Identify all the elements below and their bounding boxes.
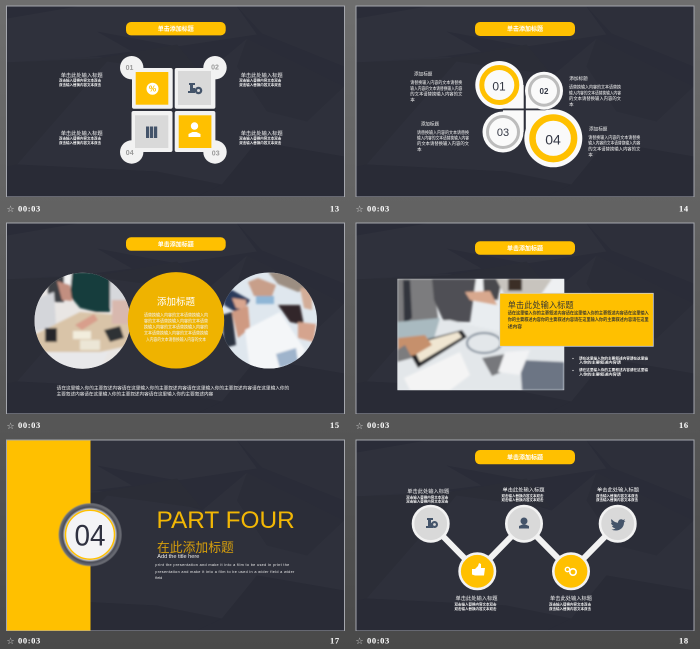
text block 02: 本 [569, 101, 574, 108]
badge number 03: 03 [212, 151, 220, 158]
badge circle 02 [203, 56, 227, 79]
bullet list: 请在这里输入你的主要叙述内容请在这里输 [579, 367, 648, 372]
text block 02: 添加标题 [569, 75, 588, 82]
label 5: 双击输入替换内容文本双击 [596, 497, 638, 502]
footer 18: 18 [679, 636, 689, 646]
circle 03 [482, 110, 524, 152]
label 3: 双击输入替换内容文本双击 [502, 493, 544, 498]
label top right: 双击输入替换内容文本双击 [239, 82, 282, 87]
circle 01: 01 [492, 80, 506, 94]
title pill: 单击添加标题 [507, 244, 543, 252]
yellow circle with text: 入内容的文本请替换输入内容的文本 [146, 336, 206, 343]
footer 18: 00:03 [367, 636, 390, 646]
label 1: 双击输入替换内容文本双击 [406, 498, 449, 504]
label 5: 双击输入替换内容文本双击 [596, 493, 638, 498]
yellow text box: 单击此处输入标题 [508, 300, 574, 310]
badge number 01: 01 [126, 65, 133, 72]
tile: columns [132, 111, 172, 152]
text block 04: 添加标题 [589, 126, 608, 133]
panel: slide 16 [356, 223, 694, 414]
tile: percent: % [149, 84, 156, 94]
subheading: 在此添加标题 [157, 540, 234, 555]
badge number 04: 04 [126, 150, 134, 157]
label 2: 双击输入替换内容文本双击 [454, 606, 497, 611]
label 1: 双击输入替换内容文本双击 [406, 494, 449, 500]
footer 13: 00:03 [18, 204, 41, 214]
footer 16 [356, 420, 689, 432]
footer 16: 16 [679, 420, 689, 430]
text block 01: 请替换输入内容的文本请替换 [410, 79, 463, 86]
circle 01 [475, 61, 524, 109]
footer 15: ☆ [6, 422, 15, 432]
zigzag connector [431, 524, 618, 571]
tile: money [175, 68, 215, 109]
bottom text block: 主要叙述内容请在这里输入你的主要叙述内容请在这里输入你的主要叙述内容 [57, 390, 214, 397]
footer 18 [356, 636, 689, 647]
label top left: 双击输入替换内容文本双击 [59, 82, 101, 87]
label bottom left: 单击此处输入标题 [61, 129, 103, 137]
label bottom right: 双击输入替换内容文本双击 [239, 136, 282, 140]
yellow circle with text: 换输入内容的文本请替换输入内容的 [144, 324, 208, 330]
footer 14: 14 [679, 204, 689, 214]
description text [155, 563, 295, 580]
number badge 04 [58, 503, 122, 567]
yellow text box: 述内容 [508, 323, 522, 330]
text block 03: 输入内容的文本请替换输入内容 [417, 134, 469, 142]
tile: percent [132, 68, 173, 109]
text block 04: 的文本请替换输入内容的文 [588, 145, 641, 152]
yellow text box [500, 293, 653, 346]
text block 01: 本 [410, 96, 415, 104]
label top right: 双击输入替换内容文本双击 [239, 78, 282, 82]
yellow text box: 请在这里输入你的主要叙述内容请在这里输入你的主要叙述内容请在这里输入 [508, 310, 649, 317]
yellow circle with text: 容的文本请替换输入内容的文本请替 [144, 318, 208, 324]
footer 13: ☆ [6, 205, 15, 215]
label 5 [596, 485, 640, 502]
text block 01 [410, 70, 463, 104]
text block 04: 输入内容的文本请替换输入内容 [588, 140, 641, 147]
footer 16: 00:03 [367, 420, 390, 430]
badge circle 01 [120, 56, 143, 79]
bullet list: 入你的主要叙述内容请 [579, 371, 621, 376]
footer 14 [356, 204, 689, 215]
footer 17 [6, 636, 340, 647]
label bottom left: 双击输入替换内容文本双击 [59, 136, 101, 140]
tile: person [175, 111, 215, 152]
footer 15: 15 [330, 420, 340, 430]
bottom text block [57, 384, 290, 397]
title pill [475, 22, 575, 36]
badge circle 04 [120, 140, 143, 164]
photo: business meeting [397, 279, 565, 390]
title pill: 单击添加标题 [507, 25, 543, 33]
description text: field [155, 576, 162, 580]
label 3: 双击输入替换内容文本双击 [502, 497, 544, 502]
bottom text block: 请在这里输入你的主要叙述内容请在这里输入你的主要叙述内容请在这里输入你的主要叙述内容请在这里输入你的 [57, 384, 290, 392]
yellow side band [7, 440, 90, 630]
footer 13: 13 [330, 204, 340, 214]
label bottom left [59, 129, 103, 145]
circle 03: 03 [497, 127, 509, 139]
text block 03 [417, 120, 469, 153]
description text: print the presentation and make it into a film to be used in print the [155, 563, 289, 567]
text block 02: 请替换输入内容的文本请替换 [569, 84, 621, 91]
panel: slide 18 [356, 440, 694, 630]
label 2: 单击此处输入标题 [456, 594, 498, 602]
label bottom right [239, 129, 283, 145]
title pill: 单击添加标题 [507, 453, 543, 461]
text block 01: 输入内容的文本请替换输入内容 [410, 85, 463, 92]
footer 18: ☆ [356, 637, 364, 647]
footer 14: ☆ [356, 205, 364, 215]
title pill: 单击添加标题 [158, 25, 194, 33]
yellow text box: 你的主要叙述内容你的主要叙述内容请在这里输入你的主要叙述内容请在这里 [508, 316, 649, 323]
yellow circle with text: 请替换输入内容的文本请替换输入内 [144, 312, 208, 318]
label 1 [406, 487, 450, 504]
badge circle 03 [203, 140, 227, 164]
panel: slide 17 [6, 440, 344, 630]
heading: part four: PART FOUR [156, 507, 295, 534]
text block 03: 请替换输入内容的文本请替换 [417, 129, 469, 136]
title pill [126, 237, 226, 251]
panel: slide 13 [6, 6, 344, 196]
text block 03: 添加标题 [421, 120, 439, 127]
panel: slide 14 [356, 6, 694, 196]
label 4: 双击输入替换内容文本双击 [549, 606, 591, 611]
label 5: 单击此处输入标题 [597, 485, 640, 493]
text block 03: 的文本请替换输入内容的文 [417, 140, 469, 147]
footer 17: ☆ [6, 637, 15, 647]
description text: presentation and make it into a film to be used in a wider field a wider [155, 570, 295, 574]
footer 15 [6, 420, 340, 432]
circle 04 [524, 109, 582, 167]
node 4: link icon [553, 554, 589, 589]
title pill [126, 22, 226, 35]
node 5: twitter icon [600, 506, 635, 541]
label 3: 单击此处输入标题 [502, 485, 545, 493]
label 4: 单击此处输入标题 [550, 594, 593, 602]
number badge 04: 04 [74, 520, 106, 553]
circle 02 [525, 72, 563, 110]
label 1: 单击此处输入标题 [407, 487, 450, 495]
label 2: 双击输入替换内容文本双击 [454, 602, 497, 606]
circle 04: 04 [545, 132, 561, 148]
badge number 02: 02 [211, 64, 219, 72]
label 3 [502, 485, 545, 502]
panel: slide 15 [6, 223, 344, 414]
label 4: 双击输入替换内容文本双击 [549, 602, 591, 606]
title pill [475, 241, 575, 255]
label bottom right: 单击此处输入标题 [241, 129, 283, 137]
bullet list [572, 356, 648, 376]
text block 02: 的文本请替换输入内容的文 [569, 95, 621, 102]
text block 04 [588, 126, 641, 158]
label top left: 双击输入替换内容文本双击 [59, 78, 101, 82]
node 1: money icon [413, 506, 448, 541]
footer 16: ☆ [356, 422, 364, 432]
footer 15: 00:03 [18, 420, 41, 430]
footer 14: 00:03 [367, 204, 390, 214]
title pill: 单击添加标题 [158, 240, 194, 248]
label 4 [549, 594, 593, 611]
text block 01: 添加标题 [414, 70, 433, 78]
text block 04: 本 [588, 151, 593, 158]
footer 13 [6, 204, 340, 215]
node 2: thumb icon [460, 554, 495, 589]
footer 17: 00:03 [18, 636, 41, 646]
english subtitle: Add the title here [157, 554, 200, 560]
text block 01: 的文本请替换输入内容的文 [410, 90, 463, 98]
photo: desk left circle [34, 272, 131, 370]
bullet list: 请在这里输入你的主要叙述内容请在这里输 [579, 356, 648, 360]
photo: meeting right circle [221, 272, 318, 370]
text block 02: 输入内容的文本请替换输入内容 [569, 90, 621, 96]
text block 03: 本 [417, 146, 422, 153]
label top right: 单击此处输入标题 [241, 71, 283, 79]
label top left [59, 71, 103, 87]
label 2 [454, 594, 498, 611]
yellow circle with text: 添加标题 [157, 296, 195, 308]
label bottom left: 双击输入替换内容文本双击 [59, 140, 101, 145]
text block 02 [569, 75, 621, 108]
label bottom right: 双击输入替换内容文本双击 [239, 140, 282, 145]
bullet list: 入你的主要叙述内容请 [579, 360, 621, 364]
footer 17: 17 [330, 636, 340, 646]
label top left: 单击此处输入标题 [61, 71, 103, 79]
yellow circle with text: 文本请替换输入内容的文本请替换输 [144, 330, 208, 336]
circle 02: 02 [540, 87, 549, 96]
node 3: person icon [506, 506, 542, 541]
title pill [475, 450, 575, 464]
yellow circle with text [128, 272, 224, 368]
text block 04: 请替换输入内容的文本请替换 [588, 134, 641, 141]
label top right [239, 71, 283, 87]
